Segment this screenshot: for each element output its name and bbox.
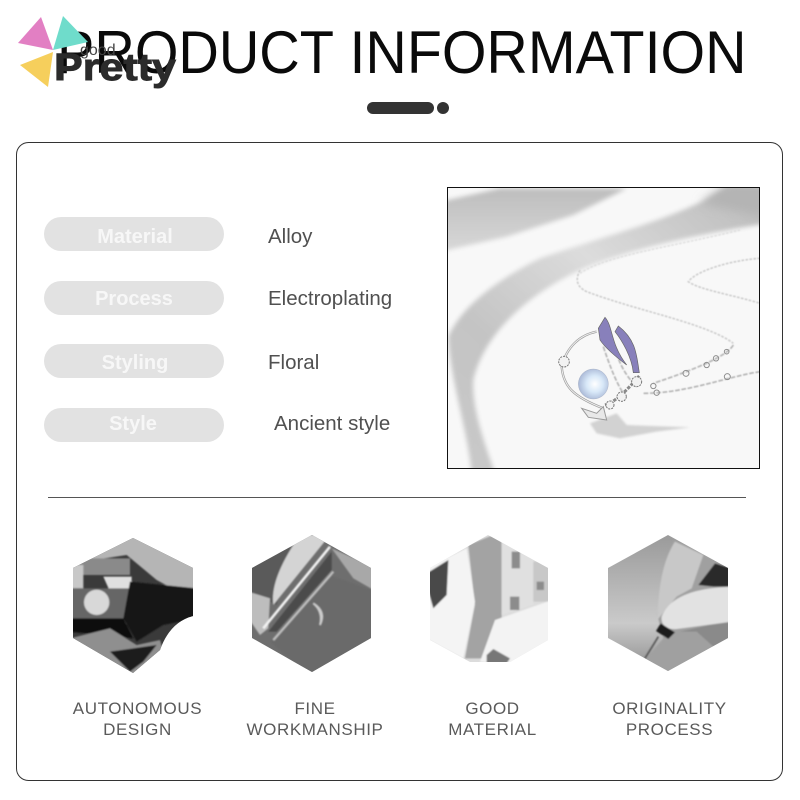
spec row: styling: Floral	[268, 351, 319, 374]
feature: fine workmanship: WORKMANSHIP	[247, 720, 383, 739]
spec row: material	[44, 217, 313, 251]
spec row: style	[44, 408, 390, 442]
feature: autonomous design	[70, 532, 202, 739]
spec row: styling	[44, 344, 319, 378]
product photo: necklace	[440, 183, 767, 473]
title underline accent	[367, 102, 449, 114]
logo: good Pretty	[18, 16, 176, 89]
hexagon photo: hand with tool	[608, 535, 732, 675]
hexagon photo: workers in white	[430, 535, 548, 662]
feature: good material	[426, 532, 552, 739]
divider	[48, 497, 746, 498]
spec row: styling: Styling	[102, 352, 168, 374]
hexagon photo: craftsman	[73, 538, 193, 673]
title: INFORMATION	[350, 19, 746, 86]
label: ORIGINALITY	[612, 699, 727, 718]
hexagon photo: tweezers	[252, 535, 371, 672]
label: AUTONOMOUS	[73, 699, 202, 718]
logo: good Pretty: good	[80, 42, 116, 59]
spec row: process: Electroplating	[268, 287, 392, 310]
feature: originality process	[608, 535, 732, 739]
spec row: style: Ancient style	[274, 412, 390, 435]
feature: fine workmanship	[247, 535, 383, 739]
spec row: material: Material	[97, 226, 173, 248]
panel: product information card	[16, 142, 782, 780]
label: FINE	[294, 699, 336, 718]
spec row: process	[44, 281, 392, 315]
logo: good Pretty: Pretty	[54, 47, 176, 89]
spec row: material: Alloy	[268, 225, 313, 248]
title: PRODUCT	[57, 19, 334, 86]
label: GOOD	[465, 699, 520, 718]
spec row: style: Style	[109, 413, 157, 435]
feature: autonomous design: DESIGN	[103, 720, 172, 739]
feature: originality process: PROCESS	[626, 720, 713, 739]
feature: good material: MATERIAL	[448, 720, 537, 739]
spec row: process: Process	[95, 288, 173, 310]
title	[57, 19, 746, 86]
